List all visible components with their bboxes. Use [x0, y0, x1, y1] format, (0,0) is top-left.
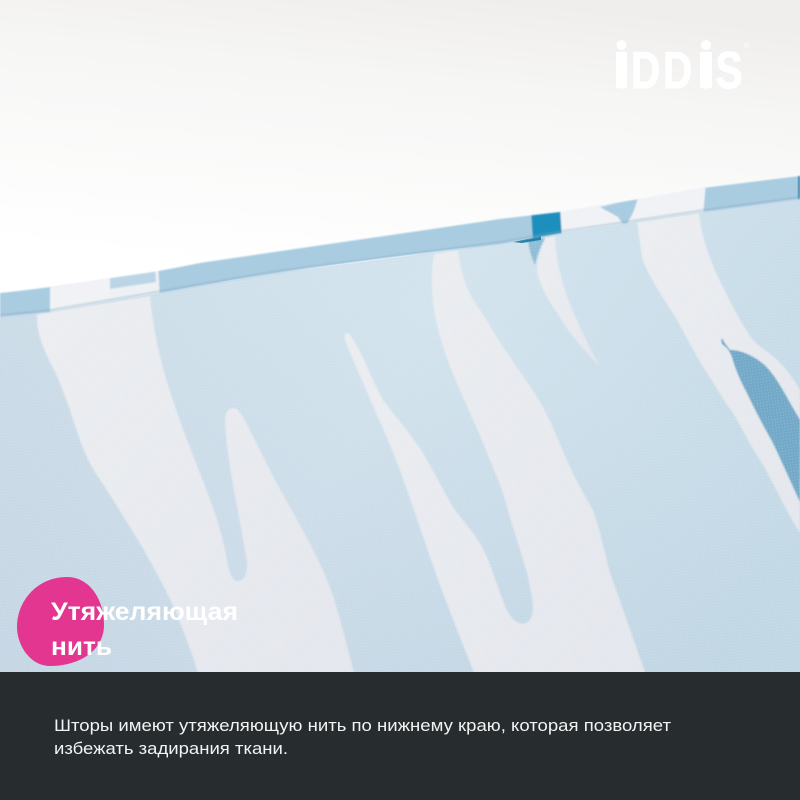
footer bar — [0, 672, 800, 800]
hem teal stripe — [530, 211, 562, 239]
hem white stripe left — [49, 278, 111, 312]
fabric dark sliver under hem — [513, 236, 541, 243]
hem blue wedge — [600, 199, 638, 224]
description text — [54, 716, 671, 758]
hem light stripe — [110, 270, 160, 302]
heading: Утяжеляющая — [51, 598, 238, 626]
pink blob — [17, 577, 104, 666]
description text: Шторы имеют утяжеляющую нить по нижнему краю, которая позволяет — [54, 716, 671, 735]
curtain hem with weighted thread — [0, 170, 800, 320]
hem base — [0, 170, 800, 320]
fabric blue leaf — [721, 338, 800, 502]
description text: избежать задирания ткани. — [54, 739, 288, 758]
hem dark end — [798, 170, 800, 202]
fabric white pattern — [37, 213, 800, 680]
heading — [51, 598, 238, 661]
hem tinted top of light stripe — [110, 271, 156, 290]
logo: IDDIS: ® — [744, 41, 750, 50]
hem white stripes right — [559, 187, 706, 234]
heading: нить — [51, 633, 112, 661]
hem lower shading — [0, 198, 800, 316]
fabric weave texture — [0, 176, 800, 676]
fabric base — [0, 199, 800, 680]
logo: IDDIS: IDDIS — [616, 41, 743, 99]
fabric lower-left shading — [0, 199, 800, 680]
photo: curtain fabric panel — [0, 176, 800, 680]
fabric blue leaf patch under hem — [528, 238, 545, 265]
